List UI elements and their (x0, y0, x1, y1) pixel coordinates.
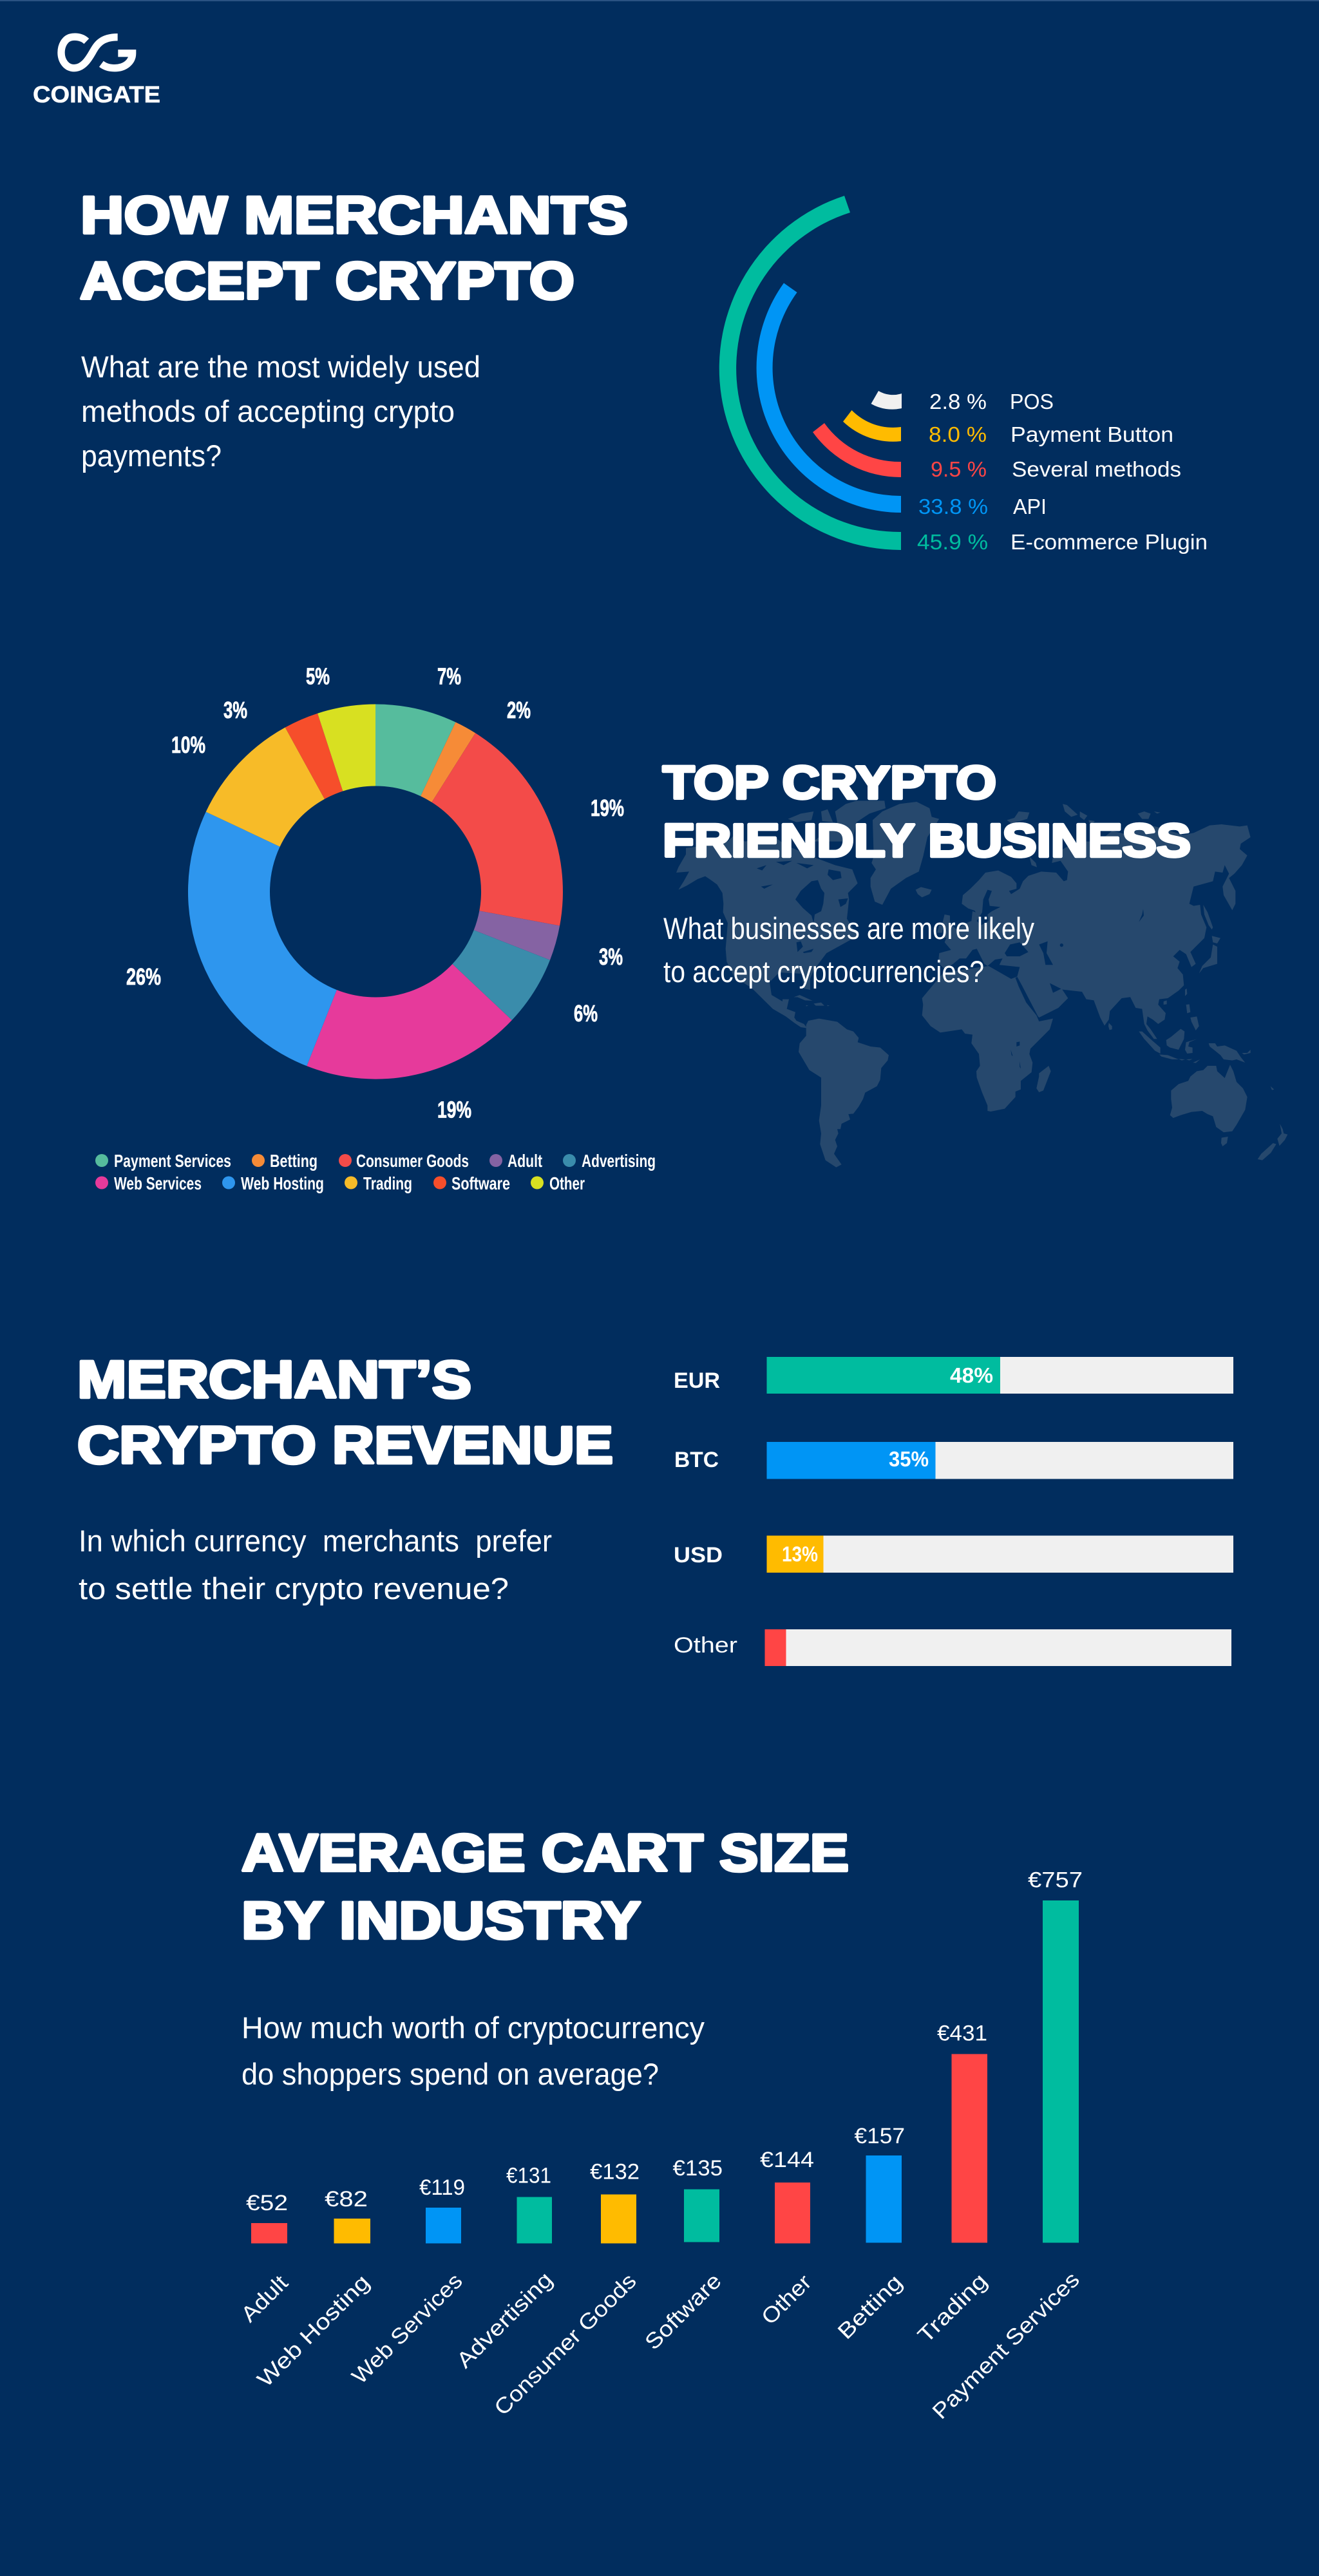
legend row: POS (929, 390, 1054, 413)
column: Other: Other (757, 2270, 817, 2329)
bar: USD: 13% (782, 1542, 818, 1566)
text block: accepting methods question: methods of accepting crypto (81, 394, 455, 428)
donut percentage labels (126, 663, 624, 1123)
column: Advertising (452, 2164, 558, 2373)
column: Payment Services: Payment Services (927, 2268, 1085, 2424)
legend row: Several methods (931, 457, 1181, 481)
heading: how merchants accept crypto (80, 186, 628, 310)
legend: donut categories: Software (451, 1173, 510, 1193)
legend row: API (918, 495, 1047, 518)
column: Web Services (347, 2175, 468, 2389)
text block: cart size question: do shoppers spend on average? (242, 2057, 659, 2091)
bar: Other (674, 1629, 1231, 1666)
text block: revenue question (79, 1524, 552, 1605)
slice: Payment Services (375, 705, 455, 796)
donut percentage labels: 19% (591, 795, 624, 821)
logo: Coingate: COINGATE (33, 81, 160, 108)
donut percentage labels: 6% (574, 1000, 598, 1027)
logo: Coingate (33, 37, 160, 108)
heading: average cart size by industry: AVERAGE CART SIZE (242, 1824, 849, 1882)
column: Software: Software (640, 2269, 726, 2354)
North America, Greenland and arctic islands (668, 800, 956, 1028)
column: Adult: Adult (236, 2270, 293, 2327)
South-East Asia and Oceania (1108, 989, 1287, 1160)
column: Web Services: €119 (419, 2175, 465, 2200)
legend: donut categories (95, 1151, 656, 1193)
slice: Trading (206, 728, 325, 847)
column: Web Hosting (252, 2187, 375, 2392)
legend row: Payment Button (929, 422, 1173, 446)
arc: API (757, 283, 901, 513)
legend row: E-commerce Plugin: 45.9 % (917, 530, 988, 554)
legend row: E-commerce Plugin: E-commerce Plugin (1011, 530, 1208, 554)
text block: accepting methods question: What are the most widely used (81, 350, 480, 384)
donut percentage labels: 3% (223, 697, 247, 723)
column: Trading: €431 (937, 2021, 987, 2045)
heading: merchant's crypto revenue: MERCHANT’S (77, 1350, 471, 1409)
column: Payment Services (927, 1868, 1085, 2424)
heading: merchant's crypto revenue: CRYPTO REVENUE (77, 1416, 613, 1475)
legend: donut categories: Advertising (582, 1151, 656, 1171)
slice: Consumer Goods (432, 733, 563, 926)
legend: donut categories: Web Hosting (241, 1173, 324, 1193)
legend row: E-commerce Plugin (917, 530, 1208, 554)
column: Web Hosting: €82 (325, 2187, 368, 2211)
arc: Payment Button (843, 410, 901, 442)
legend: donut categories: Betting (270, 1151, 318, 1171)
text block: revenue question: In which currency merchants prefer (79, 1524, 552, 1558)
text block: business question: to accept cryptocurrencies? (663, 954, 984, 989)
bar: USD: USD (674, 1543, 723, 1567)
bar: BTC: BTC (674, 1448, 719, 1472)
legend row: API: 33.8 % (918, 495, 988, 518)
bar: EUR: 48% (950, 1363, 993, 1387)
slice: Web Hosting (188, 812, 337, 1066)
legend row: API: API (1013, 495, 1047, 518)
legend row: Payment Button: Payment Button (1011, 422, 1173, 446)
column: Software (640, 2156, 726, 2354)
column: Trading: Trading (913, 2269, 992, 2348)
column: Advertising: Advertising (452, 2268, 558, 2373)
chart: average cart size columns (236, 1868, 1085, 2424)
arc: E-commerce Plugin (719, 196, 901, 550)
column: Trading (913, 2021, 992, 2348)
legend row: POS: POS (1010, 390, 1054, 413)
legend row: Several methods: 9.5 % (931, 457, 987, 481)
arc: POS (871, 391, 902, 410)
legend: donut categories: Web Services (114, 1173, 202, 1193)
heading: average cart size by industry: BY INDUSTRY (242, 1891, 641, 1950)
heading: top crypto friendly business: TOP CRYPTO (663, 757, 996, 809)
donut percentage labels: 19% (437, 1096, 471, 1123)
text block: accepting methods question: payments? (81, 439, 222, 473)
heading: how merchants accept crypto: HOW MERCHANTS (81, 186, 628, 245)
column: Software: €135 (672, 2156, 723, 2181)
heading: merchant's crypto revenue (77, 1350, 613, 1475)
legend row: POS: 2.8 % (929, 390, 987, 413)
South America, Africa and Caribbean (793, 966, 1053, 1168)
legend: donut categories: Trading (363, 1173, 412, 1193)
slice: Web Services (307, 964, 512, 1079)
text block: cart size question: How much worth of cryptocurrency (242, 2011, 705, 2045)
slice: Adult (474, 911, 560, 960)
text block: accepting methods question (81, 350, 480, 473)
bar: BTC (674, 1442, 1233, 1479)
column: Adult (236, 2191, 293, 2327)
column: Web Services: Web Services (347, 2269, 468, 2389)
donut percentage labels: 2% (507, 697, 531, 723)
column: Betting: €157 (854, 2124, 905, 2148)
donut percentage labels: 7% (437, 663, 461, 689)
legend row: Payment Button: 8.0 % (929, 422, 987, 446)
legend: donut categories: Other (549, 1173, 585, 1193)
world map background (668, 800, 1287, 1168)
column: Adult: €52 (246, 2191, 288, 2215)
legend: donut categories: Adult (508, 1151, 542, 1171)
arc: Several methods (813, 423, 901, 477)
slice: Betting (421, 722, 475, 802)
bar: USD (674, 1535, 1233, 1573)
heading: top crypto friendly business (663, 757, 1191, 867)
bar: Other: Other (674, 1633, 737, 1658)
chart: radial bars of payment methods (719, 196, 1208, 554)
column: Consumer Goods (489, 2160, 641, 2420)
heading: how merchants accept crypto: ACCEPT CRYPTO (80, 252, 574, 310)
column: Other (757, 2148, 817, 2329)
donut percentage labels: 26% (126, 963, 161, 990)
donut percentage labels: 5% (306, 663, 330, 689)
bar: EUR (674, 1357, 1233, 1394)
legend: donut categories: Consumer Goods (356, 1151, 469, 1171)
donut percentage labels: 10% (171, 732, 205, 758)
bar: BTC: 35% (889, 1447, 929, 1471)
slice: Other (318, 705, 375, 791)
donut percentage labels: 3% (599, 943, 623, 970)
slice: Advertising (452, 930, 550, 1020)
chart: donut of top business categories (126, 663, 624, 1123)
column: Other: €144 (760, 2148, 814, 2172)
heading: average cart size by industry (242, 1824, 849, 1950)
bar: EUR: EUR (674, 1368, 720, 1393)
heading: top crypto friendly business: FRIENDLY BUSINESS (663, 815, 1191, 867)
legend row: Several methods: Several methods (1012, 457, 1181, 481)
column: Consumer Goods: Consumer Goods (489, 2269, 641, 2420)
column: Payment Services: €757 (1028, 1868, 1083, 1892)
slice: Software (285, 714, 343, 799)
Eurasia (938, 804, 1251, 1039)
column: Advertising: €131 (506, 2164, 551, 2188)
text block: cart size question (242, 2011, 705, 2091)
column: Web Hosting: Web Hosting (252, 2270, 375, 2392)
column: Betting (833, 2124, 907, 2344)
chart: settlement currency bars (674, 1357, 1233, 1666)
text block: business question: What businesses are more likely (663, 911, 1034, 945)
text block: revenue question: to settle their crypto revenue? (79, 1571, 509, 1605)
water bodies on the map (757, 861, 1144, 1068)
column: Betting: Betting (833, 2270, 907, 2344)
legend: donut categories: Payment Services (114, 1151, 231, 1171)
text block: business question (663, 911, 1034, 989)
column: Consumer Goods: €132 (590, 2160, 640, 2184)
